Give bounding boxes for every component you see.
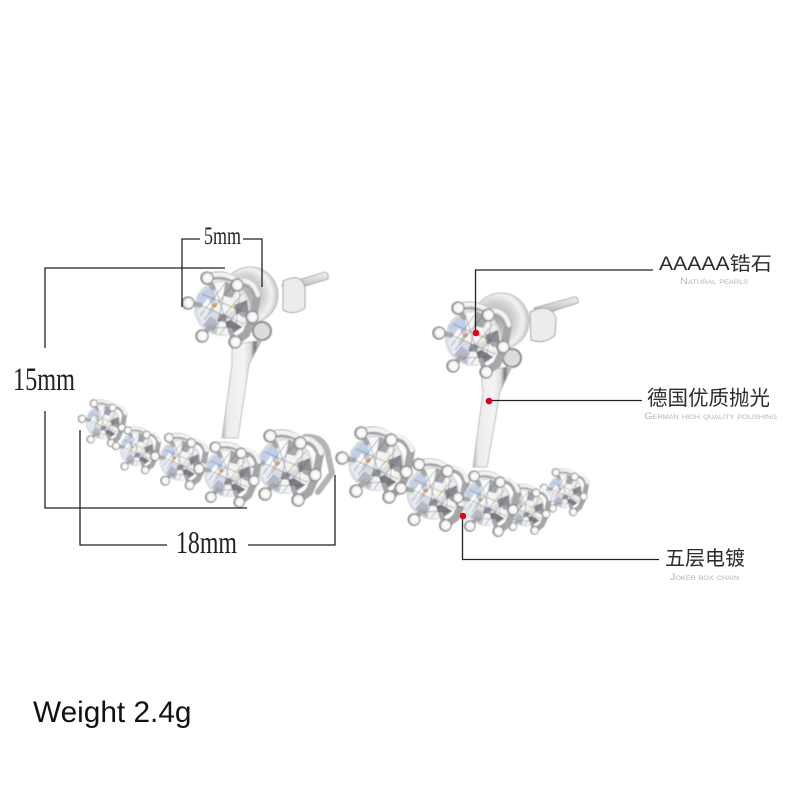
5mm dimension line xyxy=(182,239,262,307)
lower gem 5 xyxy=(245,430,321,506)
end basket of gem 5 xyxy=(305,437,332,492)
callout: AAAAA zircon: Natural pearls xyxy=(680,276,748,286)
backplate xyxy=(473,293,529,349)
lower gem 1 xyxy=(336,427,412,503)
earring post xyxy=(282,272,328,292)
lower gem 4 xyxy=(499,484,550,535)
backplate xyxy=(222,267,278,323)
5mm label: 5mm xyxy=(204,223,241,250)
connector loop xyxy=(503,349,521,367)
18mm dimension line xyxy=(80,430,335,545)
lower gem 2 xyxy=(395,459,467,531)
callout: five-layer plating xyxy=(460,513,745,582)
callout: German polishing xyxy=(486,387,777,421)
weight label: Weight 2.4g xyxy=(33,696,191,729)
lower gem 5 xyxy=(540,469,587,516)
connector loop xyxy=(253,322,271,340)
earring clutch xyxy=(283,278,305,313)
earring clutch xyxy=(530,308,556,342)
callout: AAAAA zircon xyxy=(473,253,772,336)
15mm dimension line xyxy=(45,268,247,508)
top gemstone xyxy=(433,302,509,378)
callout: five-layer plating: 五层电镀 xyxy=(665,547,745,570)
right earring illustration xyxy=(336,293,587,537)
earring post xyxy=(534,297,578,316)
connector stem xyxy=(222,340,262,438)
15mm label: 15mm xyxy=(13,362,75,398)
callout: German polishing: 德国优质抛光 xyxy=(647,387,770,410)
18mm label: 18mm xyxy=(176,524,237,560)
callout: five-layer plating: Joker box chain xyxy=(670,572,739,582)
top gemstone xyxy=(182,272,258,348)
callout: German polishing: German high quality polishing xyxy=(644,411,777,421)
callout: AAAAA zircon: AAAAA锆石 xyxy=(659,253,772,275)
connector stem xyxy=(473,366,512,467)
lower gem 2 xyxy=(112,427,159,474)
lower gem 3 xyxy=(150,433,207,490)
left earring illustration xyxy=(78,267,332,508)
lower gem 4 xyxy=(193,442,259,508)
lower gem 1 xyxy=(78,400,125,447)
lower gem 3 xyxy=(452,471,518,537)
